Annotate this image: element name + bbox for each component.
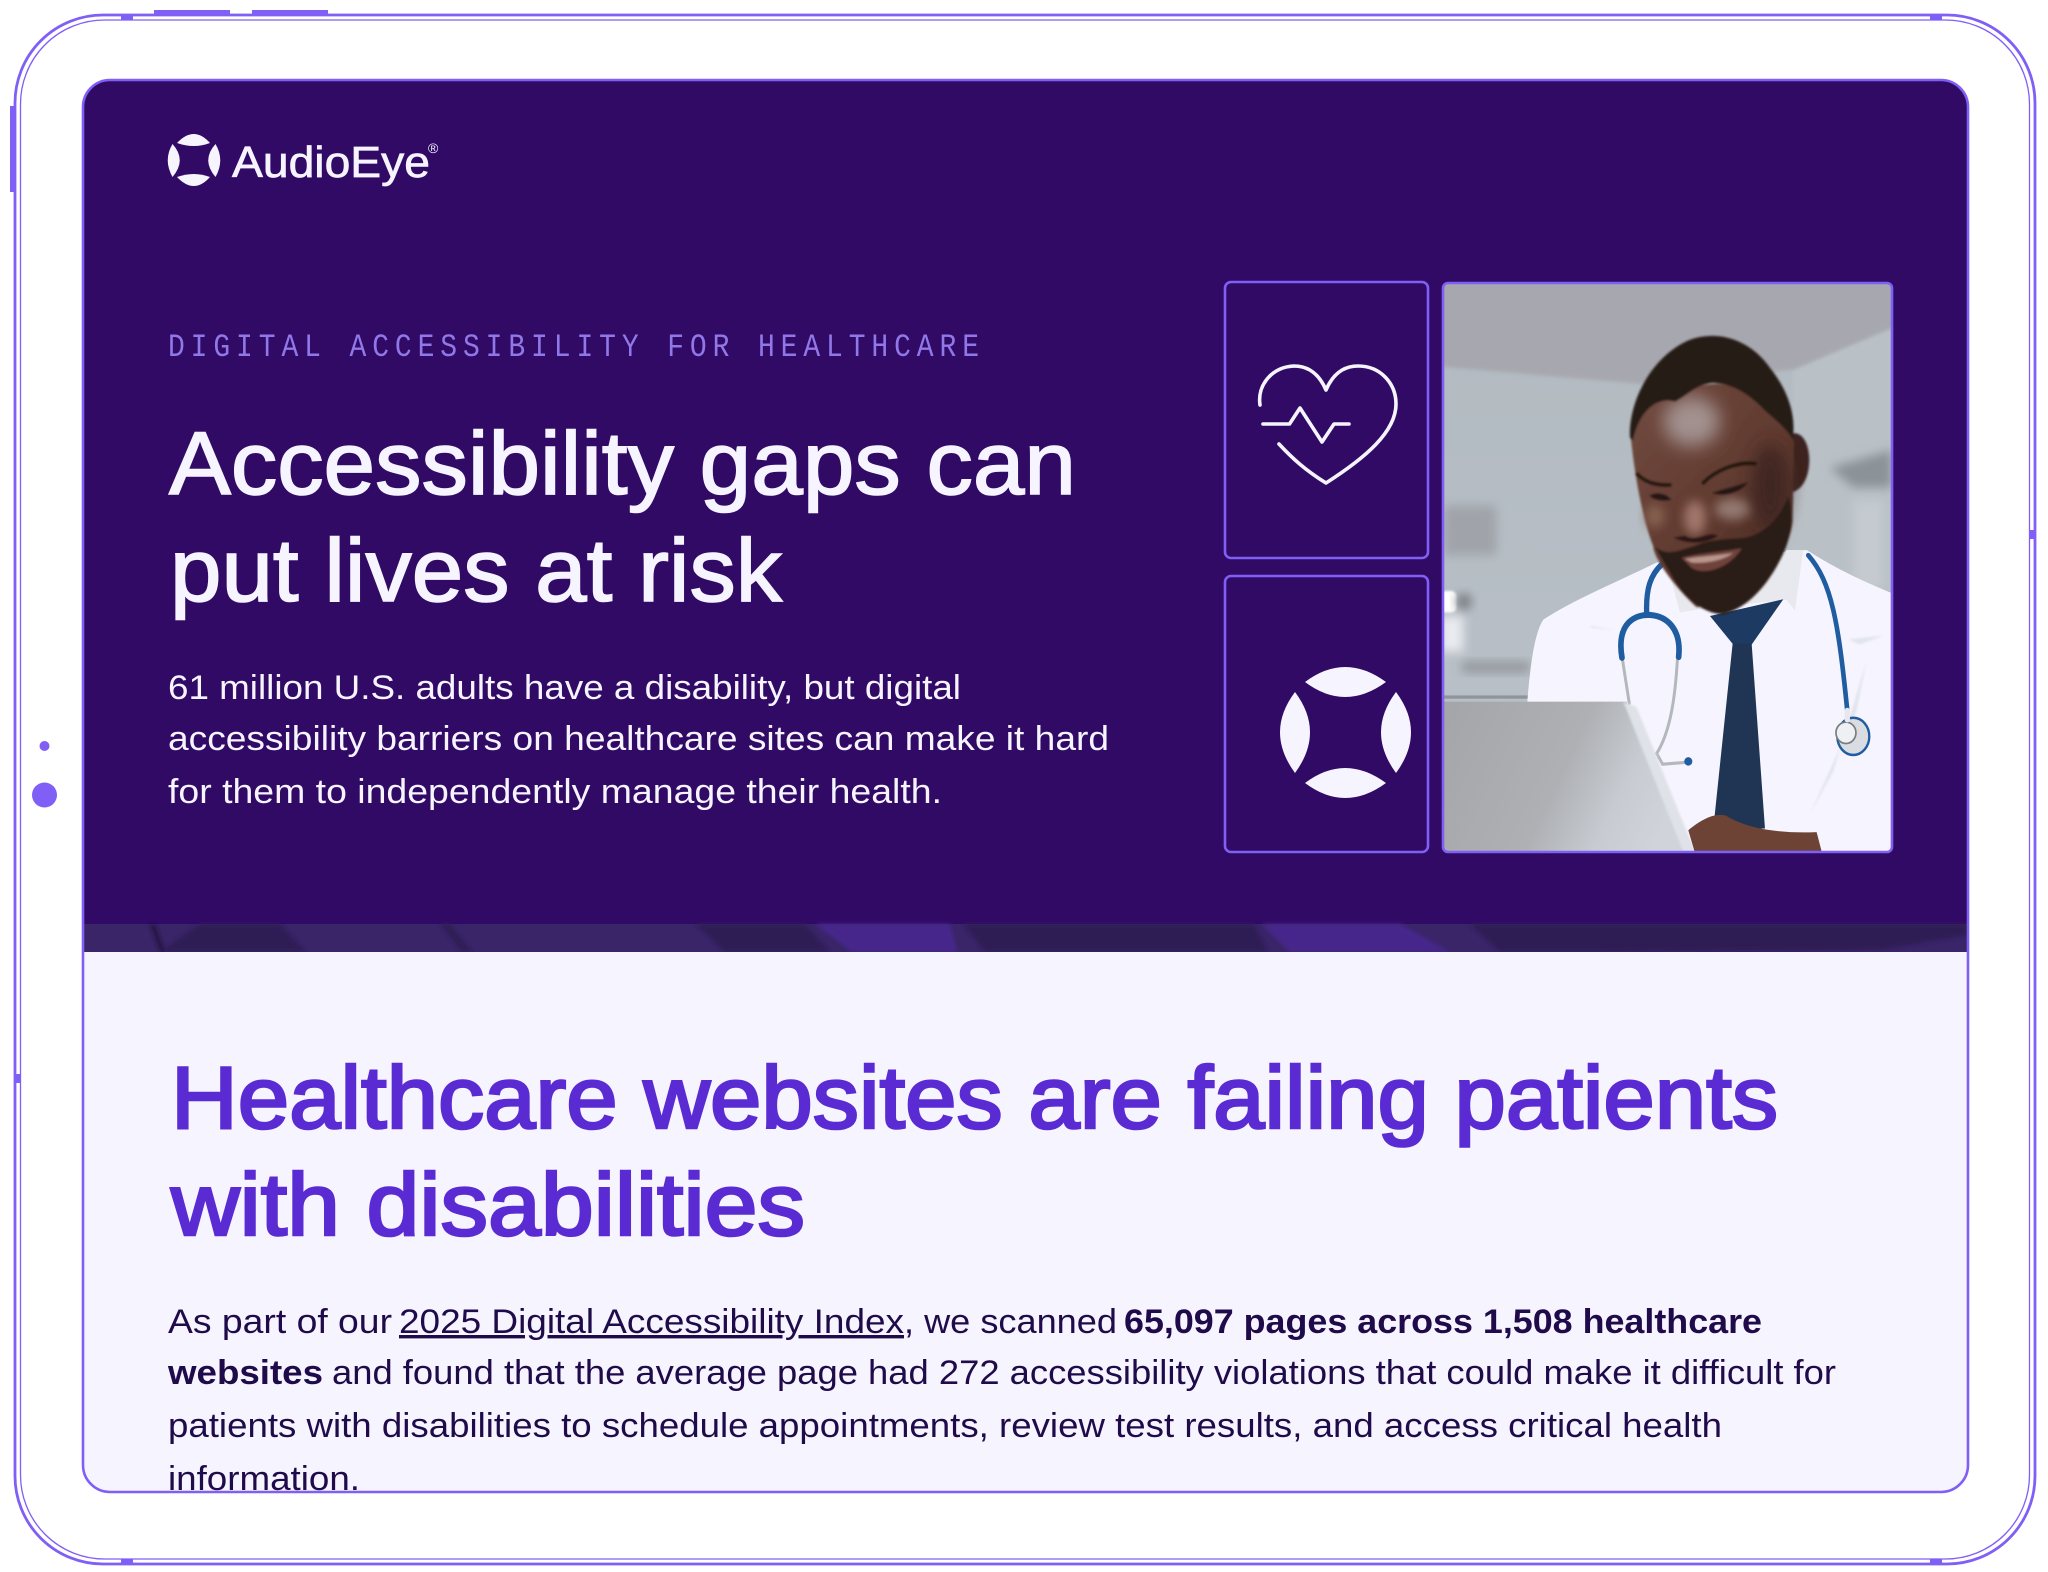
shirt collar [1670,550,1803,612]
hero headline: Accessibility gaps can [169,413,1076,513]
section heading: with disabilities [170,1155,805,1254]
hero body text [168,669,1109,811]
kicker: DIGITAL ACCESSIBILITY FOR HEALTHCARE [168,330,979,367]
icon tile: heart with pulse [1225,282,1428,558]
hero body text: for them to independently manage their health. [168,773,942,811]
nose shadow [1673,534,1718,543]
photo background [1444,284,1891,706]
hero body text: accessibility barriers on healthcare sites can make it hard [168,720,1109,758]
intro paragraph: patients with disabilities to schedule appointments, review test results, and access critical health [168,1407,1722,1445]
hero headline [169,413,1076,620]
laptop [1444,702,1694,851]
hair [1630,336,1793,441]
textured band [83,924,1968,952]
intro paragraph: information. [168,1460,360,1498]
logo: AudioEye: AudioEye [232,138,430,187]
intro paragraph: websites [167,1354,323,1392]
stethoscope [1621,555,1869,766]
lower content background [83,952,1968,1492]
intro paragraph: , we scanned [904,1303,1117,1341]
hand [1688,814,1822,851]
icon tile: AudioEye mark [1225,576,1428,852]
brows and eyes [1637,463,1755,485]
photo: doctor at laptop [1433,279,1907,864]
doctor's head [1630,336,1809,614]
hero headline: put lives at risk [170,520,783,620]
lab coat [1527,550,1900,864]
mouth [1682,548,1742,571]
beard [1655,496,1791,614]
necktie [1710,599,1783,645]
logo: AudioEye [168,134,439,187]
section heading: Healthcare websites are failing patients [171,1048,1778,1147]
hero body text: 61 million U.S. adults have a disability, but digital [168,669,961,707]
section heading [170,1048,1778,1254]
report link: 2025 Digital Accessibility Index [399,1303,904,1341]
intro paragraph: and found that the average page had 272 accessibility violations that could make it difficult for [332,1354,1836,1392]
intro paragraph: As part of our [168,1303,392,1341]
hero panel background [83,80,1968,925]
logo: AudioEye: ® [428,140,439,156]
intro paragraph [167,1303,1836,1498]
bold scan numbers: 65,097 pages across 1,508 healthcare [1124,1303,1762,1341]
